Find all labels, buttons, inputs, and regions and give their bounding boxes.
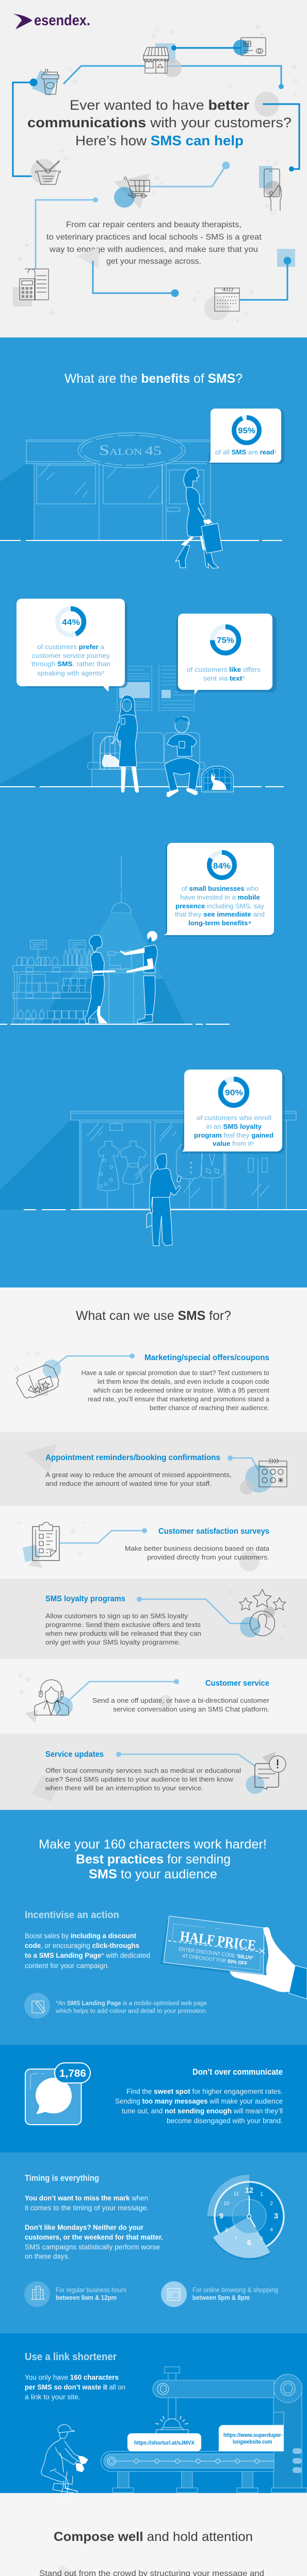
- text: timing: You don’t want to miss the mark when: [25, 2194, 148, 2202]
- callout: 75% like offers: 75%: [217, 636, 234, 645]
- illustration: URL shortening machine: https://shorturl.at/sJMVX: [134, 2440, 195, 2446]
- text: marketing: [82, 1369, 270, 1412]
- item: business hours: [24, 2281, 126, 2307]
- callout: 90% of loyalty members: in an SMS loyalty: [206, 1123, 262, 1130]
- heading: surveys: Customer satisfaction surveys: [158, 1527, 269, 1536]
- figure: customer at counter: [85, 935, 116, 1023]
- chart: clock with peak times: 7: [234, 2235, 237, 2242]
- text: service updates: [45, 1767, 241, 1792]
- heading: uses: What can we use SMS for?: [76, 1309, 231, 1323]
- callout: 84% small businesses: of small businesses who: [182, 885, 258, 892]
- item: service updates: [32, 1750, 286, 1802]
- block: timing: [24, 2174, 307, 2499]
- callout: 84% small businesses: 84%: [213, 862, 231, 871]
- text: introduction paragraph: [46, 221, 262, 266]
- figure: shop assistant handing bag: [120, 931, 157, 1023]
- heading: over communicate: Don’t over communicate: [192, 2067, 283, 2077]
- scene: salon storefront: [0, 433, 282, 540]
- heading: timing: Timing is everything: [25, 2174, 99, 2183]
- item: appointment reminders: [25, 1444, 287, 1495]
- chart: clock with peak times: 11: [234, 2191, 239, 2197]
- text: over communicate: become disengaged with your brand.: [167, 2117, 283, 2125]
- icon: credit card: [233, 38, 266, 56]
- callout: 84% small businesses: [164, 843, 274, 937]
- callout: 44% prefer SMS: through SMS, rather than: [31, 660, 110, 668]
- text: service updates: Offer local community services such as medical or educational: [45, 1767, 241, 1774]
- item: business hours: For regular business hours: [56, 2286, 126, 2294]
- text: incentivise: Boost sales by including a discount: [25, 1932, 136, 1940]
- chart: clock with peak times: 9: [219, 2212, 223, 2221]
- icon: shopping cart: [114, 174, 150, 209]
- callout: 90% of loyalty members: of customers who enroll: [197, 1114, 271, 1122]
- callout: 90% of loyalty members: program feel they gained: [194, 1131, 273, 1139]
- scene: vet waiting room: [0, 666, 284, 787]
- text: link shortener: You only have 160 characters: [25, 2374, 119, 2381]
- figure: woman with shopping bag: [175, 468, 222, 568]
- figure: woman with cat carrier: [100, 695, 139, 793]
- text: link shortener: [25, 2374, 125, 2401]
- text: loyalty: [45, 1613, 201, 1646]
- icon: hand holding half price coupon: ENTER DISCOUNT CODE ‘50LUV’: [179, 1946, 254, 1961]
- callout: 84% small businesses: long-term benefits⁴: [188, 919, 251, 927]
- text: loyalty: programme. Send them exclusive offers and texts: [45, 1621, 201, 1629]
- callout: 44% prefer SMS: of customers prefer a: [37, 643, 105, 651]
- connector: customer service: [63, 1679, 179, 1705]
- icon: rabbit in cage: [202, 766, 233, 792]
- connector: coupon: [54, 1353, 135, 1366]
- connector: text to dot: [77, 247, 179, 297]
- text: marketing: let them know the details, and even include a coupon code: [98, 1378, 269, 1385]
- callout: 95% of SMS read: of all SMS are read¹: [215, 448, 277, 456]
- chart: clock with peak times: 8: [225, 2227, 228, 2233]
- heading: link shortener: Use a link shortener: [25, 2351, 117, 2363]
- text: over communicate: Sending too many messages will make your audience: [115, 2097, 283, 2105]
- illustration: URL shortening machine: longwebsite.com: [233, 2439, 272, 2445]
- heading: main title: communications with your customers?: [27, 115, 292, 130]
- callout: 44% prefer SMS: 44%: [62, 618, 80, 627]
- icon: headset agent: [18, 1673, 73, 1723]
- callout: 95% of SMS read: 95%: [238, 427, 255, 435]
- heading: best practices: Make your 160 characters work harder!: [39, 1837, 267, 1852]
- block: link shortener: [25, 2351, 307, 2499]
- icon: profile with stars: [228, 1589, 286, 1642]
- heading: main title: Here’s how SMS can help: [75, 133, 244, 148]
- chart: clock with peak times: 5: [260, 2235, 263, 2242]
- text: incentivise: [25, 1932, 150, 1970]
- chart: clock with peak times: [206, 2175, 284, 2260]
- icon: calculator and receipt: [13, 269, 49, 307]
- callout: 90% of loyalty members: value from it⁵: [213, 1140, 254, 1147]
- icon: hand holding half price coupon: HALF PRICE: [179, 1928, 257, 1954]
- heading: main title: [27, 97, 292, 148]
- callout: 84% small businesses: that they see immediate and: [175, 910, 265, 918]
- logo: esendex: esendex.: [34, 12, 90, 29]
- callout: 75% like offers: sent via text³: [203, 674, 245, 682]
- chart: clock with peak times: 2: [270, 2200, 273, 2207]
- callout: 44% prefer SMS: [17, 599, 127, 693]
- callout: 44% prefer SMS: customer service journey: [32, 652, 110, 659]
- icon: basket: [31, 159, 60, 184]
- decorative sparkles: [18, 24, 298, 321]
- icon: hand holding half price coupon: AT CHECKOUT FOR 50% OFF: [182, 1953, 248, 1967]
- text: surveys: [125, 1545, 269, 1561]
- text: introduction paragraph: way to engage with audiences, and make sure that you: [49, 245, 258, 254]
- heading: best practices: SMS to your audience: [89, 1867, 217, 1882]
- item: satisfaction surveys: [18, 1522, 269, 1571]
- heading: customer service: Customer service: [205, 1679, 269, 1688]
- heading: best practices: Best practices for sending: [76, 1852, 231, 1867]
- heading: appointments: Appointment reminders/booking confirmations: [45, 1453, 220, 1462]
- item: online shopping hours: For online browsing & shopping: [192, 2286, 278, 2294]
- callout: 90% of loyalty members: [182, 1070, 285, 1154]
- connector: cart to dot: [150, 162, 230, 187]
- icon: message counter: [25, 2063, 90, 2125]
- text: incentivise: to a SMS Landing Page* with dedicated: [25, 1952, 150, 1959]
- note: landing page: *An SMS Landing Page is a mobile-optimised web page: [56, 2001, 207, 2007]
- text: timing: SMS campaigns statistically perform worse: [25, 2243, 160, 2251]
- connector: service updates: [116, 1752, 255, 1766]
- icon: calendar: [204, 288, 239, 320]
- text: timing: customers, or the weekend for that matter.: [25, 2233, 163, 2241]
- heading: marketing: Marketing/special offers/coupons: [144, 1353, 269, 1362]
- chart: clock with peak times: 6: [247, 2239, 251, 2247]
- text: customer service: service conversation using an SMS Chat platform.: [113, 1706, 269, 1713]
- text: loyalty: when new products will be released that they can: [45, 1630, 201, 1637]
- subheading: incentivise an action: Incentivise an action: [25, 1910, 119, 1921]
- icon: clipboard checklist: [18, 1522, 86, 1568]
- panel: compose well: [19, 2530, 288, 2576]
- item: customer service: [18, 1673, 269, 1723]
- text: appointments: A great way to reduce the amount of missed appointments,: [45, 1471, 232, 1479]
- text: introduction paragraph: get your message across.: [106, 257, 201, 266]
- scene: clothes store window: [0, 1111, 307, 1210]
- text: appointments: and reduce the amount of wasted time for your staff.: [45, 1480, 212, 1487]
- connector: surveys: [59, 1528, 147, 1543]
- connector: shop to card: [171, 45, 243, 50]
- icon: alert chat bubble: [246, 1752, 286, 1794]
- text: introduction paragraph: to veterinary practices and local schools - SMS is a great: [46, 233, 262, 242]
- connector: receipt to dot: [36, 197, 98, 269]
- text: link shortener: a link to your site.: [25, 2393, 80, 2401]
- illustration: URL shortening machine: https://www.superduper-: [223, 2432, 283, 2438]
- scene: salon storefront: SALON 45: [99, 443, 161, 459]
- text: timing: [25, 2194, 163, 2260]
- text: customer service: [92, 1697, 269, 1713]
- text: over communicate: [115, 2088, 283, 2125]
- connector: cup to basket: [13, 78, 37, 176]
- text: loyalty: Allow customers to sign up to an SMS loyalty: [45, 1613, 188, 1620]
- figure: factory worker: [41, 2425, 88, 2499]
- icon: hand holding half price coupon: [160, 1916, 307, 1999]
- text: marketing: Have a sale or special promotion due to start? Text customers to: [82, 1369, 269, 1377]
- text: loyalty: only get with your SMS loyalty programme.: [45, 1639, 181, 1646]
- panel: benefits of SMS: [0, 371, 307, 1246]
- connector: loyalty: [137, 1597, 251, 1623]
- callout: 75% like offers: of customers like offers: [187, 666, 261, 673]
- text: over communicate: Find the sweet spot for higher engagement rates.: [126, 2088, 283, 2095]
- callout: 90% of loyalty members: 90%: [225, 1089, 243, 1097]
- callout: 84% small businesses: have invested in a mobile: [180, 893, 260, 901]
- item: online shopping hours: [161, 2281, 278, 2307]
- chart: clock with peak times: 3: [274, 2212, 278, 2221]
- icon: booking calendar: [240, 1459, 287, 1495]
- panel: what can we use SMS for: [14, 1309, 287, 1802]
- panel: best practices: [15, 1837, 307, 2576]
- text: customer service: Send a one off update, or have a bi-directional customer: [92, 1697, 269, 1704]
- item: business hours: between 9am & 12pm: [56, 2294, 117, 2301]
- heading: loyalty: SMS loyalty programs: [45, 1595, 125, 1603]
- panel: intro: [13, 12, 299, 321]
- text: service updates: care? Send SMS updates to your audience to let them know: [45, 1776, 234, 1783]
- text: marketing: better chance of reaching their audience.: [150, 1404, 269, 1412]
- callout: 44% prefer SMS: speaking with agents²: [37, 669, 105, 677]
- icon: coupon ticket: [14, 1351, 61, 1398]
- figure: man with phone and briefcase: [147, 1154, 181, 1246]
- text: link shortener: per SMS so don’t waste it all on: [25, 2383, 125, 2391]
- icon: shop: [143, 43, 182, 77]
- item: marketing and coupons: [14, 1351, 270, 1412]
- text: surveys: Make better business decisions based on data: [125, 1545, 269, 1552]
- text: incentivise: code, or encouraging click-throughs: [25, 1942, 139, 1950]
- text: appointments: [45, 1471, 232, 1487]
- figure: man on sofa with phone: [165, 717, 200, 797]
- callout: 75% like offers: [176, 614, 277, 694]
- connector: main blue path: [63, 66, 281, 87]
- heading: service updates: Service updates: [45, 1750, 104, 1759]
- connector: title to phone: [254, 92, 299, 172]
- item: online shopping hours: between 5pm & 8pm: [192, 2294, 250, 2301]
- chart: clock with peak times: 12: [245, 2187, 253, 2195]
- item: loyalty programs: [45, 1589, 286, 1646]
- chart: clock with peak times: 1: [260, 2191, 263, 2197]
- heading: main title: Ever wanted to have better: [70, 97, 250, 113]
- callout: 84% small businesses: presence including SMS, say: [175, 902, 264, 910]
- logo: esendex: [13, 12, 90, 29]
- connector dot: [279, 84, 284, 89]
- callout: 95% of SMS read: [206, 409, 284, 464]
- text: timing: it comes to the timing of your message.: [25, 2204, 149, 2212]
- icon: coffee cup: [32, 70, 59, 96]
- text: marketing: read rate, you’ll ensure that marketing and promotions stand a: [88, 1396, 269, 1403]
- text: timing: on these days.: [25, 2252, 70, 2260]
- chart: clock with peak times: 4: [270, 2227, 273, 2233]
- text: over communicate: tune out, and not sending enough will mean they’ll: [122, 2107, 283, 2115]
- connector: appointments: [228, 1455, 258, 1471]
- text: incentivise: content for your campaign.: [25, 1962, 109, 1970]
- connector: calendar to dot: [239, 249, 295, 300]
- text: marketing: which can be redeemed online or instore. With a 95 percent: [93, 1387, 270, 1394]
- block: don't over communicate: [25, 2063, 283, 2125]
- heading: best practices: [39, 1837, 267, 1882]
- heading: benefits: What are the benefits of SMS?: [64, 371, 243, 386]
- text: introduction paragraph: From car repair centers and beauty therapists,: [66, 221, 241, 229]
- note: landing page: which helps to add colour and detail to your promotion.: [55, 2008, 207, 2014]
- icon: message counter: 1,786: [59, 2068, 86, 2079]
- chart: clock with peak times: 10: [223, 2200, 230, 2207]
- text: timing: Don’t like Mondays? Neither do your: [25, 2224, 144, 2231]
- scene: retail shop with lamp: [0, 857, 230, 1024]
- text: service updates: when there will be an interruption to your service.: [45, 1785, 203, 1792]
- illustration: URL shortening machine: [101, 2367, 307, 2493]
- icon: hand holding phone: [259, 166, 281, 211]
- text: surveys: provided directly from your customers.: [147, 1554, 269, 1561]
- heading: compose well: Compose well and hold attention: [54, 2530, 253, 2544]
- note: landing page: [24, 1993, 207, 2019]
